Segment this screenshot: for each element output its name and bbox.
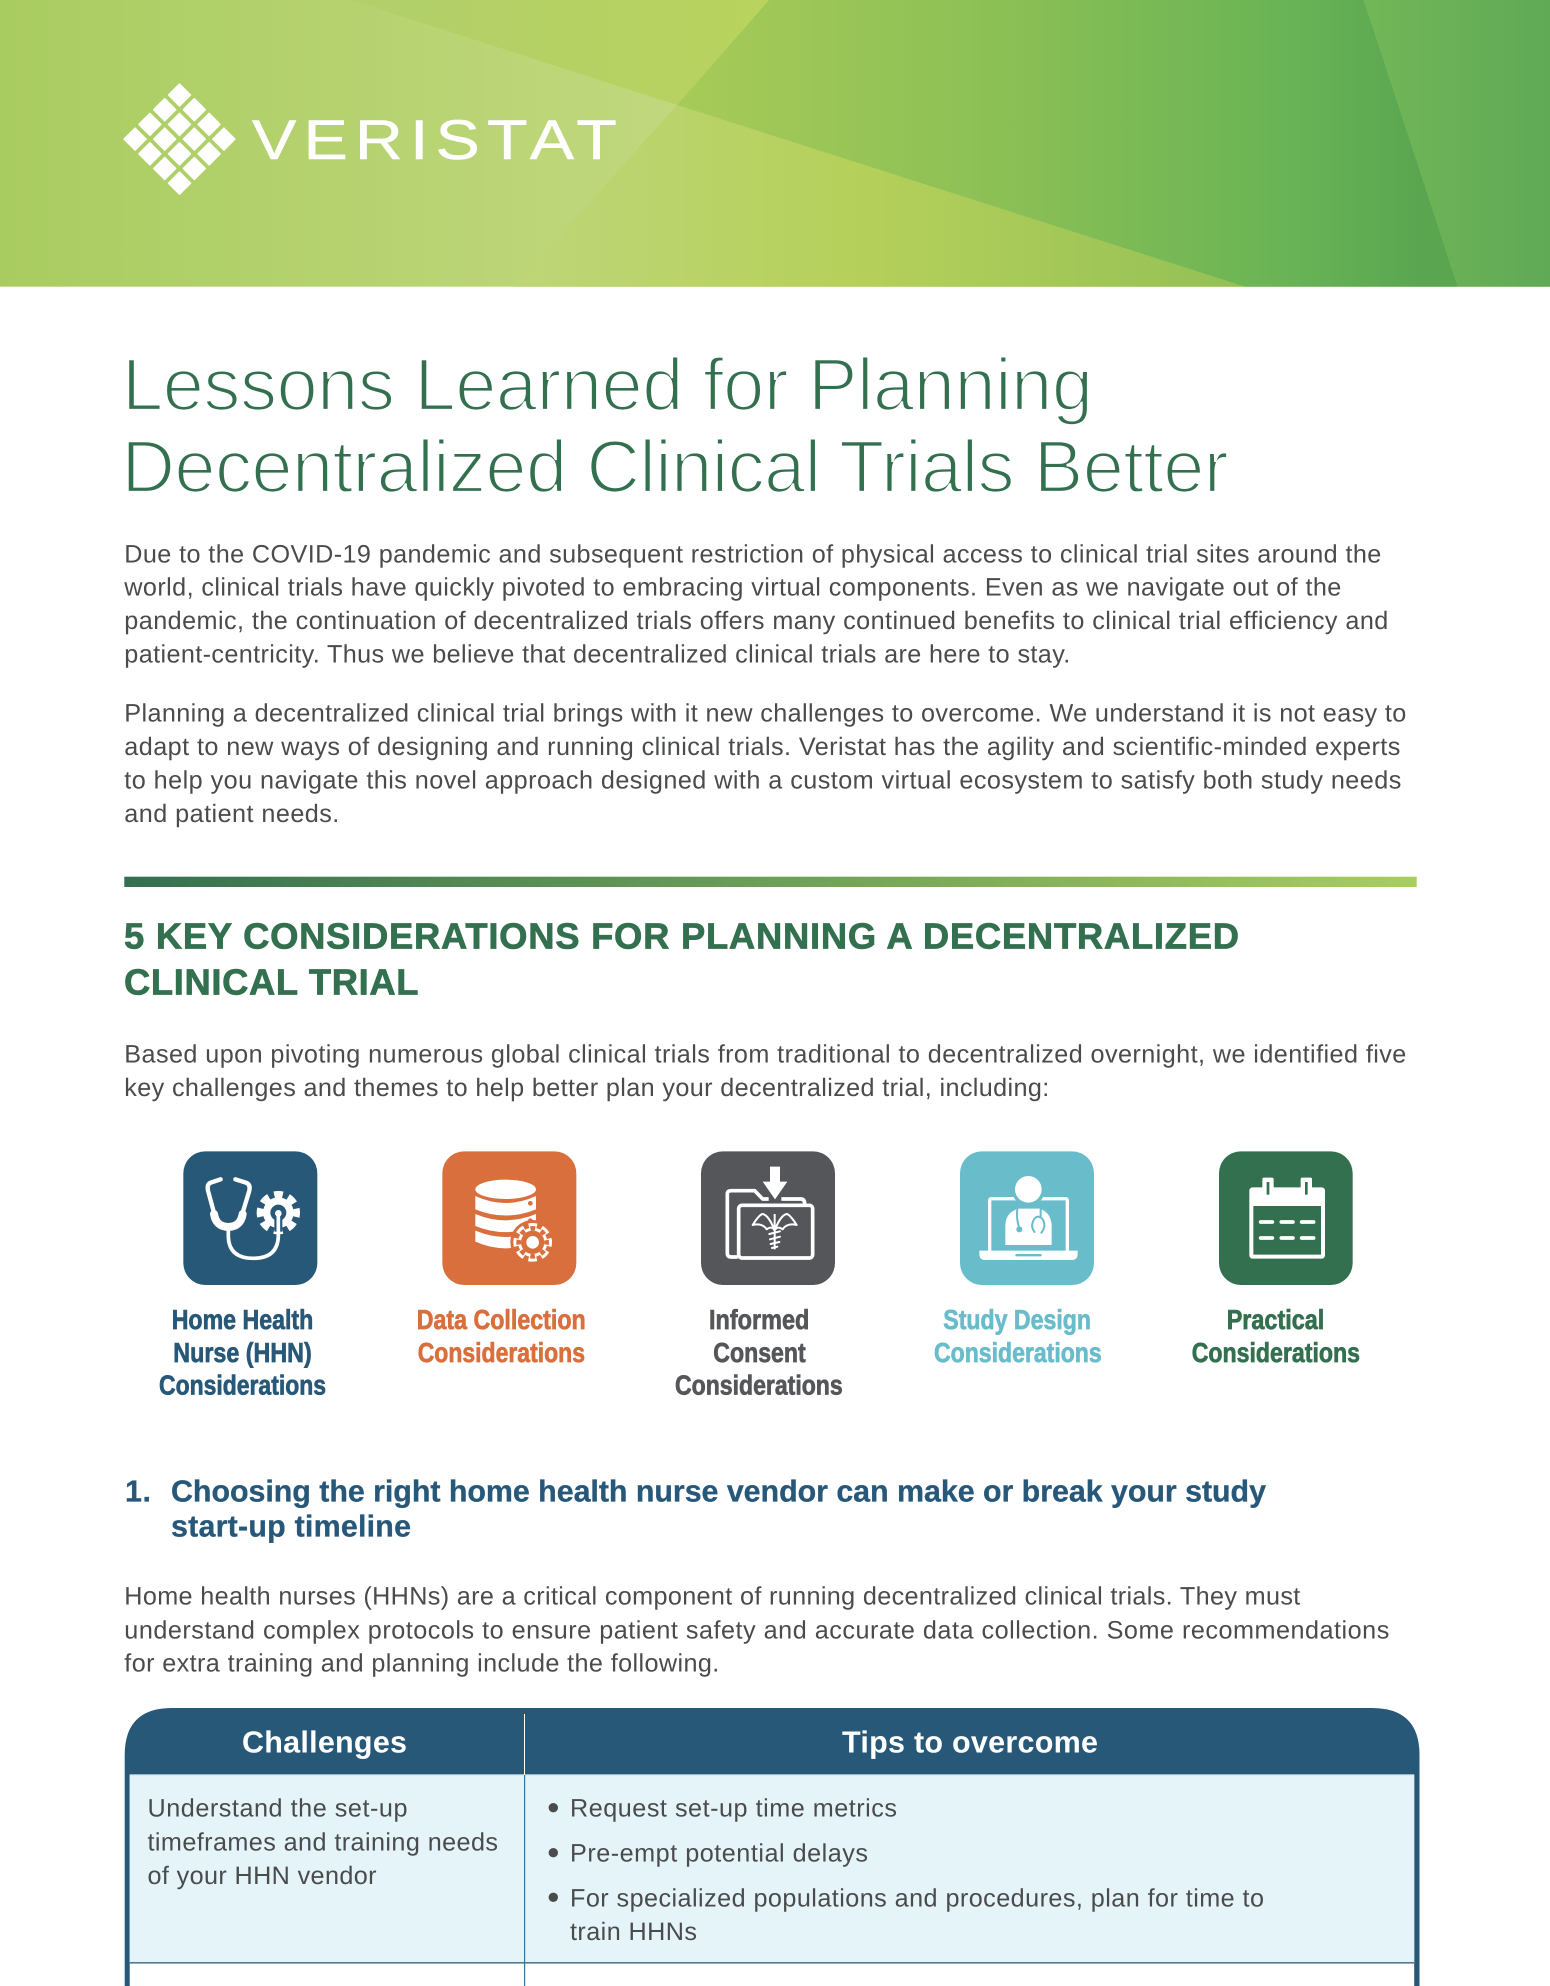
text block: intro paragraph 2 [124,700,1406,828]
label: home health nurse considerations: Home Health [172,1304,313,1335]
heading: 5 key considerations: 5 KEY CONSIDERATIONS FOR PLANNING A DECENTRALIZED [124,916,1239,957]
logo wordmark: VERISTAT [252,108,624,171]
heading: 5 key considerations [124,916,1239,1003]
text block: intro paragraph 1: world, clinical trials have quickly pivoted to embracing virtual components. Even as we navigate out of the [123,574,1341,602]
challenge text: timeframes and training needs [148,1829,498,1857]
tips bullet list: train HHNs [570,1918,697,1946]
label: practical considerations: Considerations [1192,1337,1360,1368]
text block: intro paragraph 2: Planning a decentralized clinical trial brings with it new challenges to overcome. We understand it is not easy to [124,700,1406,728]
text block: intro paragraph 2: and patient needs. [124,800,339,828]
logo: Veristat [124,84,624,194]
challenge text: Understand the set-up [148,1795,408,1823]
title: Decentralized Clinical Trials Better [122,425,1228,508]
label: data collection considerations [417,1304,586,1368]
text block: home health nurses intro [124,1582,1389,1678]
table header: tips to overcome: Tips to overcome [842,1725,1098,1759]
heading: section 1: start-up timeline [171,1510,411,1544]
label: practical considerations [1192,1304,1360,1368]
tips bullet list: Pre-empt potential delays [570,1840,868,1868]
text block: home health nurses intro: Home health nurses (HHNs) are a critical component of running decentralized clinical trials. They must [124,1582,1300,1610]
heading: section 1 [125,1475,1266,1544]
label: home health nurse considerations [159,1304,326,1401]
title [122,343,1228,508]
tips bullet list: Request set-up time metrics [570,1795,897,1823]
heading: 5 key considerations: CLINICAL TRIAL [124,962,418,1003]
icon: data collection database and gear [442,1151,576,1285]
icon: informed consent folder with caduceus [701,1151,835,1285]
text block: home health nurses intro: for extra training and planning include the following. [124,1650,719,1678]
text block: intro paragraph 1: patient-centricity. Thus we believe that decentralized clinical trials are here to stay. [124,640,1070,668]
challenge text [148,1795,498,1890]
icon: study design doctor on laptop [960,1151,1094,1285]
tips bullet list: For specialized populations and procedures, plan for time to [570,1885,1264,1913]
text block: home health nurses intro: understand complex protocols to ensure patient safety and accurate data collection. Some recommendations [124,1616,1389,1644]
label: home health nurse considerations: Nurse (HHN) [173,1337,312,1368]
icon: home health nurse stethoscope and gear [183,1151,317,1285]
challenge text: of your HHN vendor [148,1862,376,1890]
label: data collection considerations: Considerations [418,1337,585,1368]
heading: section 1: 1. [125,1475,151,1509]
label: informed consent considerations: Consent [713,1337,806,1368]
table row: highlighted row [130,1775,1414,1963]
header banner [0,0,1550,287]
table header: challenges: Challenges [242,1725,407,1759]
tips bullet list [549,1795,1264,1946]
text block: intro paragraph 1 [123,540,1388,668]
text block: intro paragraph 1: pandemic, the continuation of decentralized trials offers many continued benefits to clinical trial efficiency and [124,607,1388,635]
table: challenges and tips [125,1708,1420,1986]
label: informed consent considerations: Informed [709,1304,809,1335]
text block: intro paragraph 2: adapt to new ways of designing and running clinical trials. Veristat has the agility and scientific-minded experts [124,733,1400,761]
icon: practical considerations calendar [1219,1151,1353,1285]
heading: section 1: Choosing the right home health nurse vendor can make or break your study [171,1475,1266,1509]
label: informed consent considerations: Considerations [675,1370,843,1401]
title: Lessons Learned for Planning [122,343,1093,426]
label: data collection considerations: Data Collection [417,1304,586,1335]
label: home health nurse considerations: Considerations [159,1370,326,1401]
label: study design considerations [934,1304,1102,1368]
label: informed consent considerations [675,1304,843,1401]
text block: five key challenges intro: Based upon pivoting numerous global clinical trials from traditional to decentralized overnight, we identified five [124,1041,1406,1069]
icon: diamond logo mark [124,84,235,194]
label: study design considerations: Study Design [943,1304,1091,1335]
text block: five key challenges intro: key challenges and themes to help better plan your decentralized trial, including: [124,1074,1049,1102]
text block: intro paragraph 1: Due to the COVID-19 pandemic and subsequent restriction of physical access to clinical trial sites around the [124,540,1381,568]
text block: intro paragraph 2: to help you navigate this novel approach designed with a custom virtual ecosystem to satisfy both study needs [124,766,1401,794]
label: study design considerations: Considerations [934,1337,1102,1368]
label: practical considerations: Practical [1227,1304,1324,1335]
text block: five key challenges intro [124,1041,1406,1102]
